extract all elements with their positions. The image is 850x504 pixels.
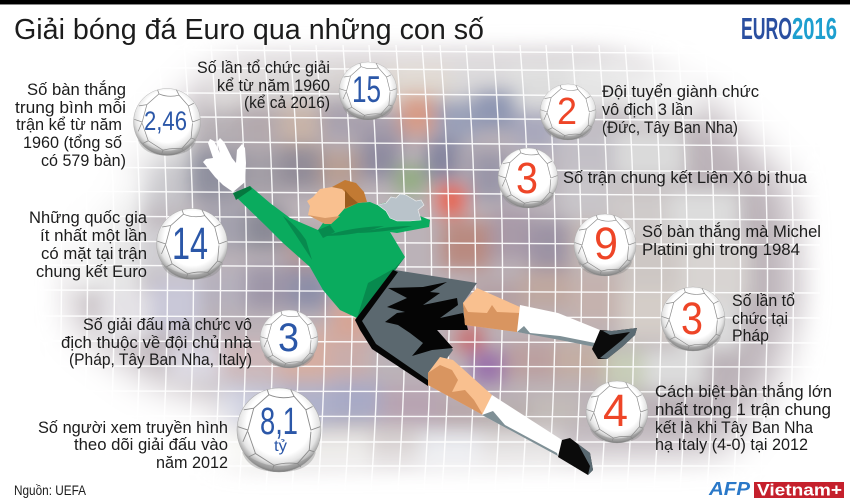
jersey (233, 186, 430, 318)
near glove (203, 138, 246, 192)
stat: 2,46 goals per match: có 579 bàn) (41, 152, 126, 170)
source: Nguồn: UEFA (14, 483, 86, 498)
stat: 14 nations: chung kết Euro (36, 263, 147, 281)
stat: 2,46 goals per match: 2,46 (144, 106, 187, 136)
stat: 2,46 goals per match: Số bàn thắng (27, 80, 126, 99)
stat: 14 nations: có mặt tại trận (41, 245, 147, 263)
stat: 9 Platini goals: 9 (594, 218, 618, 269)
stat: 15 tournaments: 15 (352, 69, 381, 110)
stat: 3 host champions (61, 310, 318, 369)
stat: 2,46 goals per match: trung bình mỗi (15, 98, 126, 117)
jersey folds (283, 216, 412, 318)
stat: 15 tournaments (197, 59, 397, 120)
top bar (0, 0, 850, 5)
shoe 1 (592, 328, 637, 359)
stat: 8,1 billion viewers: năm 2012 (156, 454, 228, 472)
stat: 4 biggest final margin: Cách biệt bàn thắng lớn (655, 382, 832, 401)
stat: 3 host champions: Số giải đấu mà chức vô (83, 316, 252, 334)
far glove (378, 194, 424, 221)
stat: 3 times hosted by France: 3 (681, 293, 703, 344)
stat: 4 biggest final margin: hạ Italy (4-0) tại 2012 (655, 436, 808, 454)
shorts (355, 270, 477, 385)
leg 1 (463, 288, 520, 332)
stat: 3 times hosted by France (661, 287, 795, 351)
stat: 3 host champions: địch thuộc về đội chủ nhà (61, 334, 253, 352)
stat: 8,1 billion viewers: 8,1 (260, 401, 298, 443)
stat: 8,1 billion viewers (38, 388, 321, 472)
stat: 8,1 billion viewers: Số người xem truyền hình (38, 419, 228, 437)
stat: 9 Platini goals: Platini ghi trong 1984 (642, 241, 800, 259)
stat: 4 biggest final margin: 4 (603, 385, 628, 436)
sock 2 (482, 395, 562, 456)
stat: 3 host champions: (Pháp, Tây Ban Nha, Italy) (69, 351, 252, 369)
leg 2 (428, 357, 492, 415)
stat: 4 biggest final margin (586, 381, 832, 454)
stat: 2 teams with 3 titles: (Đức, Tây Ban Nha) (602, 119, 738, 137)
logo: Vietnam+: Vietnam+ (757, 480, 842, 500)
stat: 3 times hosted by France: chức tại (732, 310, 788, 328)
stat: 2 teams with 3 titles: Đội tuyển giành chức (602, 83, 759, 101)
stat: 9 Platini goals (574, 214, 821, 276)
stat: 15 tournaments: kể từ năm 1960 (217, 77, 330, 95)
stat: 3 finals lost by USSR (498, 148, 808, 208)
logo: AFP: AFP (708, 479, 751, 499)
shoe 2 (558, 438, 593, 475)
stat: 3 host champions: 3 (278, 316, 299, 360)
stat: 3 finals lost by USSR: 3 (516, 154, 538, 203)
jersey cuff (233, 186, 252, 200)
stat: 2,46 goals per match: 1960 (tổng số (23, 134, 122, 152)
stat: 14 nations: ít nhất một lần (40, 227, 147, 245)
stat: 8,1 billion viewers: tỷ (274, 438, 287, 455)
stat: 15 tournaments: Số lần tổ chức giải (197, 59, 330, 77)
logo: Euro 2016: EURO (741, 11, 792, 46)
stat: 15 tournaments: (kể cả 2016) (244, 94, 330, 112)
stat: 3 times hosted by France: Số lần tổ (732, 292, 795, 310)
stat: 2,46 goals per match: trận kể từ năm (16, 116, 122, 134)
stat: 4 biggest final margin: kết là khi Tây Ban Nha (655, 419, 814, 437)
stat: 4 biggest final margin: nhất trong 1 trận chung (655, 401, 831, 419)
stat: 14 nations: Những quốc gia (29, 209, 148, 227)
head (307, 187, 345, 224)
stat: 2 teams with 3 titles: 2 (557, 91, 577, 133)
stat: 14 nations: 14 (172, 218, 208, 269)
stat: 2,46 goals per match (15, 80, 200, 170)
goalkeeper figure (203, 138, 637, 475)
stat: 3 finals lost by USSR: Số trận chung kết Liên Xô bị thua (563, 169, 808, 187)
stat: 3 times hosted by France: Pháp (732, 327, 769, 345)
stat: 2 teams with 3 titles (540, 83, 759, 140)
stat: 8,1 billion viewers: theo dõi giải đấu vào (74, 436, 228, 454)
sock 1 (517, 305, 600, 347)
title: Giải bóng đá Euro qua những con số (14, 14, 484, 46)
stat: 14 nations (29, 208, 228, 281)
stat: 2 teams with 3 titles: vô địch 3 lần (602, 101, 693, 119)
stat: 9 Platini goals: Số bàn thắng mà Michel (642, 222, 821, 241)
